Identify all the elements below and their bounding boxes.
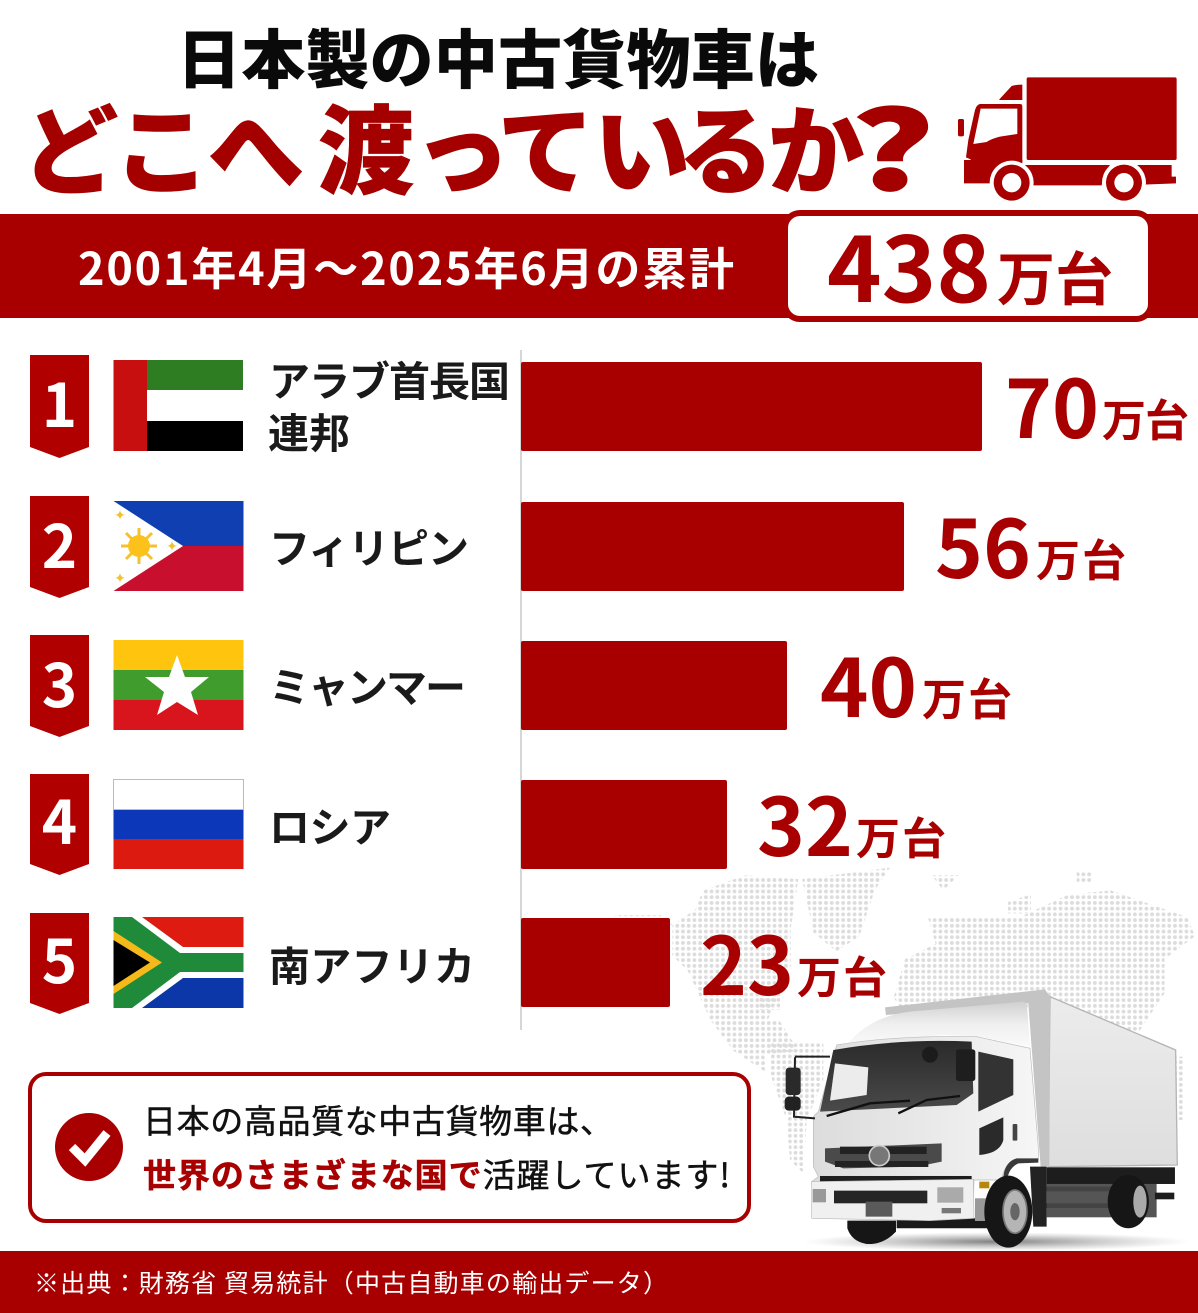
callout text bbox=[143, 1095, 730, 1197]
header band bbox=[0, 214, 1198, 318]
country name: 連邦 bbox=[268, 400, 350, 460]
value bbox=[757, 764, 946, 880]
rank ribbon 1: 1 bbox=[42, 358, 77, 445]
flag: Philippines: ✦ bbox=[166, 536, 178, 556]
country name: フィリピン bbox=[269, 515, 469, 575]
rank ribbon 5: 5 bbox=[42, 914, 77, 1001]
value bbox=[700, 903, 887, 1019]
axis line bbox=[520, 350, 522, 1030]
rank ribbon 2 bbox=[30, 496, 89, 598]
total callout: 万台 bbox=[997, 233, 1113, 317]
value: 32 bbox=[757, 764, 853, 880]
value: 23 bbox=[700, 903, 794, 1019]
flag: Philippines bbox=[114, 501, 244, 591]
value bbox=[820, 625, 1012, 741]
total callout bbox=[785, 198, 1151, 328]
value: 万台 bbox=[856, 803, 946, 867]
icon: check mark bbox=[55, 1113, 123, 1181]
country name bbox=[268, 348, 510, 460]
row 4: Russia bbox=[30, 764, 946, 880]
flag: Myanmar bbox=[114, 640, 244, 730]
icon: red truck bbox=[958, 77, 1177, 205]
value: 70 bbox=[1005, 346, 1099, 462]
callout text: 日本の高品質な中古貨物車は、 bbox=[143, 1095, 613, 1143]
country name: ミャンマー bbox=[269, 654, 466, 714]
callout text: 世界のさまざまな国で活躍しています! bbox=[143, 1149, 730, 1197]
rank ribbon 4 bbox=[30, 774, 89, 875]
rank ribbon 5 bbox=[30, 913, 89, 1014]
country name: 南アフリカ bbox=[269, 933, 475, 993]
world map dots bbox=[615, 868, 1195, 1173]
bar bbox=[521, 362, 982, 451]
value: 万台 bbox=[797, 942, 887, 1006]
row 2: Philippines bbox=[30, 486, 1126, 602]
flag: Philippines: ✦ bbox=[114, 505, 126, 525]
value: 万台 bbox=[1102, 385, 1189, 449]
bar bbox=[521, 780, 727, 869]
flag: UAE bbox=[114, 360, 243, 451]
footer band bbox=[0, 1251, 1198, 1313]
title line 2: どこへ渡っているか bbox=[22, 75, 864, 214]
total callout: 438 bbox=[827, 198, 991, 328]
value: 56 bbox=[935, 486, 1031, 602]
rank ribbon 4: 4 bbox=[42, 775, 77, 862]
rank ribbon 1 bbox=[30, 355, 89, 458]
value: 万台 bbox=[922, 664, 1012, 728]
rank ribbon 3 bbox=[30, 635, 89, 737]
title line 1: 日本製の中古貨物車は bbox=[177, 10, 819, 102]
flag: South Africa bbox=[114, 917, 244, 1008]
title question mark: ? bbox=[850, 66, 935, 222]
flag: Russia bbox=[114, 780, 244, 869]
callout box bbox=[30, 1074, 749, 1221]
rank ribbon 2: 2 bbox=[42, 499, 77, 586]
bar bbox=[521, 502, 904, 591]
header period text: 2001年4月〜2025年6月の累計 bbox=[78, 233, 734, 298]
photo: white box truck bbox=[785, 989, 1190, 1251]
value bbox=[935, 486, 1126, 602]
value bbox=[1005, 346, 1189, 462]
flag: Philippines: ✦ bbox=[114, 568, 126, 588]
value: 40 bbox=[820, 625, 917, 741]
value: 万台 bbox=[1036, 525, 1126, 589]
row 5: South Africa bbox=[30, 903, 887, 1019]
rank ribbon 3: 3 bbox=[42, 638, 77, 725]
source text: ※出典：財務省 貿易統計（中古自動車の輸出データ） bbox=[34, 1264, 668, 1300]
row 3: Myanmar bbox=[30, 625, 1012, 741]
bar bbox=[521, 918, 670, 1007]
row 1: UAE bbox=[30, 346, 1189, 462]
country name: アラブ首長国 bbox=[269, 348, 510, 408]
country name: ロシア bbox=[269, 794, 391, 854]
bar bbox=[521, 641, 787, 730]
